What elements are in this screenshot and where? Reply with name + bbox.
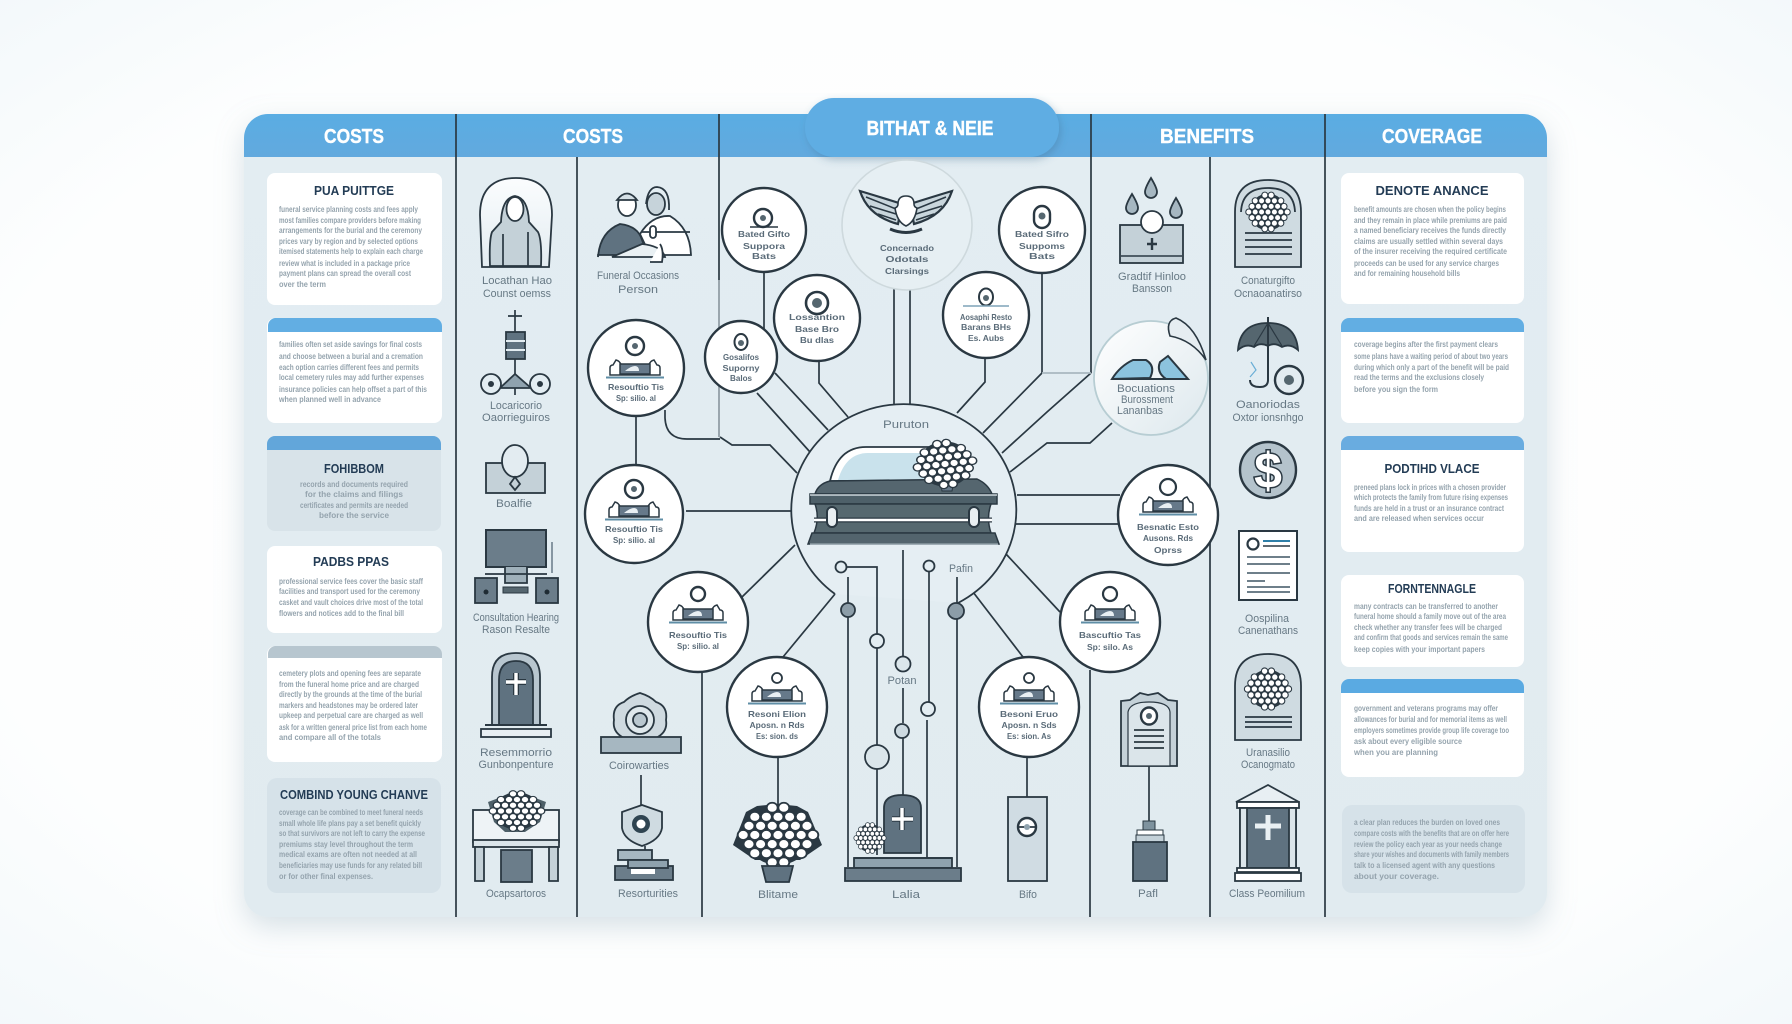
card: plan purpose: review what is included in a package price bbox=[279, 258, 410, 268]
label: table: Ocapsartoros bbox=[486, 888, 546, 900]
node: lower inner left: Resoni Elion bbox=[748, 709, 806, 719]
card: combined coverage: coverage can be combined to meet funeral needs bbox=[279, 807, 423, 817]
card: benefit allowance: claims are usually settled within several days bbox=[1354, 236, 1503, 246]
card: blue strip note: when you are planning bbox=[1353, 747, 1438, 757]
card: provider value: PODTIHD VLACE bbox=[1384, 462, 1480, 476]
icon: temple with cross bbox=[1235, 785, 1301, 881]
column 7 items bbox=[1229, 180, 1305, 900]
panel: main board bbox=[244, 114, 1547, 917]
card: provider value bbox=[1341, 436, 1524, 552]
label: panel: Bifo bbox=[1019, 889, 1037, 901]
icon: tall panel with dial bbox=[1008, 797, 1047, 881]
icon: two people bbox=[598, 187, 691, 262]
card: grey note: records and documents required bbox=[300, 479, 408, 489]
panel: left cards bbox=[267, 173, 442, 893]
node: upper right inner bbox=[943, 272, 1029, 358]
card: fees: professional service fees cover the basic staff bbox=[279, 576, 423, 586]
card: grey note: for the claims and filings bbox=[305, 489, 403, 499]
node: lower inner left: Aposn. n Rds bbox=[750, 720, 805, 730]
card: grey strip text: ask for a written general price list from each home bbox=[279, 722, 427, 732]
card: strip text: when planned well in advance bbox=[278, 394, 381, 404]
node: lower right: Sp: silo. As bbox=[1087, 642, 1133, 652]
icon: dollar coin: $ bbox=[1254, 443, 1282, 499]
icon: monitor and speakers bbox=[475, 530, 558, 603]
node: eagle circle: Clarsings bbox=[885, 266, 929, 276]
label: monitor second: Rason Resalte bbox=[482, 624, 550, 636]
card: fees: PADBS PPAS bbox=[313, 555, 389, 569]
card: blue strip text: read the terms and the exclusions closely bbox=[1354, 372, 1484, 382]
dot label: pafin: Pafin bbox=[949, 563, 973, 575]
header: costs second: COSTS bbox=[563, 126, 623, 148]
hub label: Puruton bbox=[883, 419, 929, 431]
node: lower left: Resouftio Tis bbox=[669, 630, 727, 640]
node: lower inner right: Aposn. n Sds bbox=[1002, 720, 1057, 730]
icon: bouquet in pot bbox=[733, 803, 822, 882]
icon: tower on wheels bbox=[481, 310, 550, 395]
card: plan purpose: over the term bbox=[279, 279, 326, 289]
card: provider value: and are released when services occur bbox=[1354, 513, 1485, 523]
label: lower arch second: Ocanogmato bbox=[1241, 759, 1295, 771]
card: grey summary bbox=[1342, 805, 1525, 893]
node: upper right inner: Barans BHs bbox=[961, 322, 1011, 332]
label: umbrella: Oanoriodas bbox=[1236, 399, 1301, 411]
column 6 items bbox=[1118, 178, 1186, 295]
node: upper left inner: Base Bro bbox=[795, 324, 839, 334]
card: strip text bbox=[267, 318, 442, 423]
node: upper left inner bbox=[774, 275, 860, 361]
label: arch wreath: Conaturgifto bbox=[1241, 275, 1295, 287]
card: strip text: and choose between a burial and a cremation bbox=[279, 351, 423, 361]
label: shield: Resorturities bbox=[618, 888, 678, 900]
node: lower left bbox=[648, 572, 748, 672]
label: box: Pafl bbox=[1138, 888, 1158, 900]
card: combined coverage: so that survivors are not left to carry the expense bbox=[279, 828, 425, 838]
icon: flowers on table bbox=[473, 791, 559, 882]
card: grey note: certificates and permits are needed bbox=[300, 500, 408, 510]
node: top left bbox=[722, 188, 806, 272]
node: left middle bbox=[585, 465, 683, 563]
card: blue strip text bbox=[1341, 318, 1524, 423]
card: plan purpose: prices vary by region and by selected options bbox=[279, 236, 418, 246]
node: eagle circle bbox=[842, 160, 972, 290]
card: blue strip note bbox=[1341, 679, 1524, 777]
card: strip text: insurance policies can help offset a part of this bbox=[279, 384, 427, 394]
node: lower right bbox=[1060, 572, 1160, 672]
label: headstone second: Gunbonpenture bbox=[478, 759, 554, 771]
card: benefit allowance bbox=[1341, 173, 1524, 304]
label: headstone bottom: Lalia bbox=[892, 889, 921, 901]
header: costs: COSTS bbox=[324, 126, 384, 148]
node: lower inner left bbox=[727, 657, 827, 757]
icon: eagle bbox=[860, 191, 952, 232]
node: right middle: Besnatic Esto bbox=[1137, 522, 1199, 532]
label: drops: Gradtif Hinloo bbox=[1118, 271, 1186, 283]
card: strip text: families often set aside savings for final costs bbox=[279, 339, 422, 349]
label: headstone: Resemmorrio bbox=[480, 747, 552, 759]
column dividers bbox=[456, 114, 1325, 917]
node: large right: Bocuations bbox=[1117, 383, 1176, 395]
node: lower right: Bascuftio Tas bbox=[1079, 630, 1141, 640]
node: top left: Bats bbox=[752, 251, 776, 261]
node: right middle: Ausons. Rds bbox=[1143, 533, 1193, 543]
node: top left: Bated Gifto bbox=[738, 229, 790, 239]
label: figure second: Counst oemss bbox=[483, 288, 551, 300]
lower connector dots bbox=[836, 550, 964, 867]
card: benefit allowance: benefit amounts are chosen when the policy begins bbox=[1354, 204, 1506, 214]
node: left small: Gosalifos bbox=[723, 352, 759, 362]
label: document second: Canenathans bbox=[1238, 625, 1298, 637]
icon: balloon on board bbox=[486, 445, 545, 493]
node: upper right inner: Es. Aubs bbox=[968, 333, 1004, 343]
card: transferable: and confirm that goods and services remain the same bbox=[1354, 632, 1508, 642]
icon: arch with wreath lower bbox=[1235, 654, 1301, 740]
card: blue strip text: before you sign the form bbox=[1354, 384, 1438, 394]
column 2 items bbox=[473, 178, 559, 900]
central hub: casket circle bbox=[791, 404, 1016, 603]
node: left small: Suporny bbox=[722, 363, 760, 373]
icon: shield on stack bbox=[615, 805, 673, 880]
label: balloon: Boalfie bbox=[496, 498, 532, 510]
icon: swoosh bbox=[1168, 318, 1206, 360]
label: lower arch: Uranasilio bbox=[1246, 747, 1290, 759]
panel: right cards bbox=[1341, 173, 1525, 893]
node: left upper: Sp: silio. al bbox=[616, 393, 656, 403]
card: combined coverage: medical exams are often not needed at all bbox=[279, 849, 417, 859]
header: benefits: BENEFITS bbox=[1160, 126, 1254, 148]
icon: dollar coin bbox=[1240, 442, 1296, 499]
label: tower: Locaricorio bbox=[490, 400, 542, 412]
card: plan purpose: arrangements for the burial and the ceremony bbox=[279, 225, 422, 235]
header: coverage: COVERAGE bbox=[1382, 126, 1482, 148]
card: transferable: FORNTENNAGLE bbox=[1388, 582, 1476, 596]
node: upper left inner: Lossantion bbox=[789, 312, 845, 322]
card: fees bbox=[267, 546, 442, 633]
card: provider value: preneed plans lock in prices with a chosen provider bbox=[1354, 482, 1506, 492]
icon: casket with flowers bbox=[808, 436, 999, 544]
card: benefit allowance: and for remaining household bills bbox=[1354, 268, 1460, 278]
card: provider value: funds are held in a trust or an insurance contract bbox=[1354, 503, 1504, 513]
label: temple: Class Peomilium bbox=[1229, 888, 1305, 900]
node: lower inner right: Besoni Eruo bbox=[1000, 709, 1058, 719]
card: blue strip text: during which only a part of the benefit will be paid bbox=[1354, 362, 1509, 372]
node: top right: Bated Sifro bbox=[1015, 229, 1069, 239]
label: document: Oospilina bbox=[1245, 613, 1290, 625]
label: bouquet: Blitame bbox=[758, 889, 798, 901]
node: right middle bbox=[1118, 465, 1218, 565]
node: large right: Lananbas bbox=[1117, 405, 1163, 417]
label: people: Funeral Occasions bbox=[597, 270, 679, 282]
card: grey strip text: from the funeral home price and are charged bbox=[279, 679, 419, 689]
card: grey summary: talk to a licensed agent with any questions bbox=[1354, 860, 1495, 870]
icon: cross headstone with flowers bbox=[845, 795, 961, 881]
card: plan purpose: PUA PUITTGE bbox=[314, 184, 394, 198]
card: combined coverage: small whole life plans pay a set benefit quickly bbox=[279, 818, 421, 828]
card: blue strip text: some plans have a waiting period of about two years bbox=[1354, 351, 1508, 361]
connector lines bbox=[636, 272, 1149, 822]
card: combined coverage: or for other final expenses. bbox=[279, 871, 373, 881]
node: right middle: Oprss bbox=[1154, 545, 1182, 555]
card: grey strip text: upkeep and perpetual care are charged as well bbox=[279, 710, 423, 720]
label: figure: Locathan Hao bbox=[482, 275, 552, 287]
icon: veiled figure arch bbox=[480, 178, 552, 267]
card: transferable: keep copies with your important papers bbox=[1354, 644, 1485, 654]
node: top right: Suppoms bbox=[1019, 241, 1065, 251]
label: umbrella second: Oxtor ionsnhgo bbox=[1232, 412, 1304, 424]
node: upper left inner: Bu dlas bbox=[800, 335, 834, 345]
icon: drops and urn bbox=[1120, 178, 1183, 263]
node: lower left: Sp: silio. al bbox=[677, 641, 719, 651]
node: large right: Burossment bbox=[1121, 394, 1173, 406]
icon: arch with wreath bbox=[1235, 180, 1301, 267]
card: transferable: funeral home should a family move out of the area bbox=[1354, 611, 1506, 621]
card: strip text: local cemetery rules may add further expenses bbox=[279, 372, 424, 382]
card: combined coverage: beneficiaries may use funds for any related bill bbox=[279, 860, 422, 870]
node: upper right inner: Aosaphi Resto bbox=[960, 312, 1012, 322]
card: combined coverage: premiums stay level throughout the term bbox=[279, 839, 413, 849]
node: eagle circle: Concernado bbox=[880, 243, 934, 253]
column 3 items bbox=[597, 187, 691, 900]
card: benefit allowance: and they remain in place while premiums are paid bbox=[1354, 215, 1507, 225]
card: benefit allowance: a named beneficiary receives the funds directly bbox=[1354, 225, 1506, 235]
card: blue strip note: ask about every eligible source bbox=[1354, 736, 1462, 746]
node: top right: Bats bbox=[1029, 251, 1055, 261]
node: left upper: Resouftio Tis bbox=[608, 382, 664, 392]
card: combined coverage: COMBIND YOUNG CHANVE bbox=[280, 788, 428, 802]
header pill: centre title bbox=[805, 98, 1059, 157]
card: grey summary: a clear plan reduces the burden on loved ones bbox=[1354, 817, 1500, 827]
node: left small bbox=[705, 321, 777, 393]
card: grey strip text: and compare all of the totals bbox=[279, 732, 381, 742]
node: left upper bbox=[588, 320, 684, 416]
card: benefit allowance: of the insurer receiving the required certificate bbox=[1354, 246, 1507, 256]
label: people second: Person bbox=[618, 284, 658, 296]
card: plan purpose: funeral service planning costs and fees apply bbox=[279, 204, 418, 214]
card: blue strip note: employers sometimes provide group life coverage too bbox=[1354, 725, 1509, 735]
card: grey strip text: directly by the grounds at the time of the burial bbox=[279, 689, 422, 699]
card: blue strip note: allowances for burial and for memorial items as well bbox=[1354, 714, 1507, 724]
node: eagle circle: Odotals bbox=[886, 254, 929, 264]
card: grey note bbox=[267, 436, 441, 531]
icon: box with books bbox=[1133, 821, 1167, 881]
icon: plaque bbox=[1121, 693, 1177, 766]
card: grey note: before the service bbox=[319, 510, 389, 520]
label: drops second: Bansson bbox=[1132, 283, 1172, 295]
card: plan purpose: payment plans can spread the overall cost bbox=[279, 268, 411, 278]
card: blue strip text: coverage begins after the first payment clears bbox=[1354, 339, 1498, 349]
node: top right bbox=[999, 187, 1085, 273]
card: benefit allowance: proceeds can be used for any service charges bbox=[1354, 258, 1499, 268]
node: large right bbox=[1094, 318, 1208, 435]
node: left middle: Resouftio Tis bbox=[605, 524, 663, 534]
card: grey summary: compare costs with the benefits that are on offer here bbox=[1354, 828, 1509, 838]
icon: arched headstone bbox=[481, 653, 551, 737]
card: grey strip text: cemetery plots and opening fees are separate bbox=[279, 668, 421, 678]
card: fees: flowers and notices add to the final bill bbox=[279, 608, 404, 618]
icon: hills bbox=[1112, 356, 1188, 379]
label: rose: Coirowarties bbox=[609, 760, 669, 772]
node: lower inner left: Es: sion. ds bbox=[756, 731, 798, 741]
card: transferable bbox=[1341, 575, 1524, 667]
label: monitor: Consultation Hearing bbox=[473, 612, 559, 624]
label: tower second: Oaorrieguiros bbox=[482, 412, 551, 424]
node: lower inner right bbox=[979, 657, 1079, 757]
card: fees: facilities and transport used for the ceremony bbox=[279, 586, 420, 596]
card: plan purpose: itemised statements help to explain each charge bbox=[279, 246, 423, 256]
header pill: centre title: BITHAT & NEIE bbox=[866, 118, 994, 140]
card: plan purpose: most families compare providers before making bbox=[279, 215, 421, 225]
card: transferable: many contracts can be transferred to another bbox=[1354, 601, 1499, 611]
node: left small: Balos bbox=[730, 373, 752, 383]
card: blue strip note: government and veterans programs may offer bbox=[1354, 703, 1499, 713]
bottom centre items bbox=[733, 693, 1177, 901]
node: lower inner right: Es: sion. As bbox=[1007, 731, 1051, 741]
card: provider value: which protects the family from future rising expenses bbox=[1353, 492, 1508, 502]
card: benefit allowance: DENOTE ANANCE bbox=[1376, 184, 1488, 198]
card: strip text: each option carries different fees and permits bbox=[279, 362, 419, 372]
card: grey summary: about your coverage. bbox=[1354, 871, 1439, 881]
node: left middle: Sp: silio. al bbox=[613, 535, 655, 545]
card: grey strip text bbox=[267, 646, 442, 762]
icon: document bbox=[1239, 531, 1297, 600]
card: grey summary: review the policy each year as your needs change bbox=[1354, 839, 1502, 849]
node: top left: Suppora bbox=[743, 241, 785, 251]
card: fees: casket and vault choices drive most of the total bbox=[279, 597, 423, 607]
icon: umbrella and coin bbox=[1238, 317, 1303, 394]
label: arch wreath second: Ocnaoanatirso bbox=[1234, 288, 1302, 300]
icon: rose on plinth bbox=[601, 693, 681, 753]
card: transferable: check whether any transfer fees will be charged bbox=[1354, 622, 1502, 632]
card: grey summary: share your wishes and documents with family members bbox=[1354, 849, 1509, 859]
card: plan purpose bbox=[267, 173, 442, 305]
card: grey note: FOHIBBOM bbox=[324, 462, 384, 476]
dot label: potan: Potan bbox=[888, 675, 916, 687]
card: grey strip text: markers and headstones may be ordered later bbox=[279, 700, 419, 710]
card: combined coverage bbox=[267, 778, 441, 893]
